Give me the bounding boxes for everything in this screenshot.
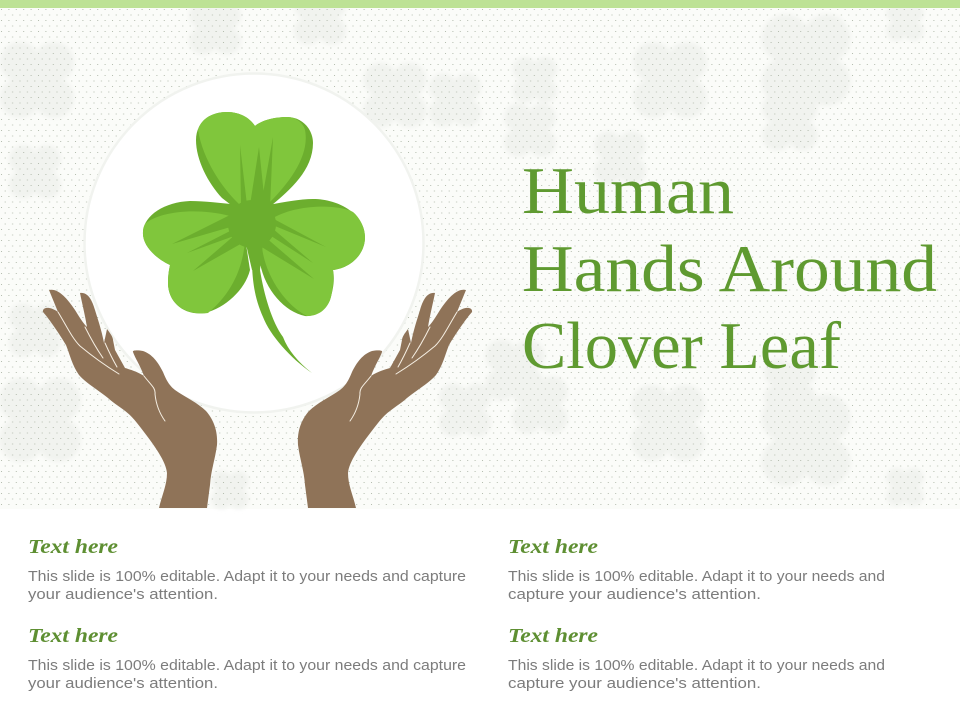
text block: top left: This slide is 100% editable. Adapt it to your needs and capture [28,568,466,585]
top band [0,0,960,8]
icon: left hand [43,290,217,508]
text block: bottom right: This slide is 100% editable. Adapt it to your needs and [508,657,885,674]
text block: top left: Text here [28,536,118,558]
icon: clover leaf [143,112,365,373]
text block: bottom left: Text here [28,625,118,647]
finger creases [350,312,457,421]
title: Clover Leaf [522,309,842,383]
stem [252,265,312,373]
icon: right hand [298,290,472,508]
text block: top right [508,536,885,603]
text block: top right: This slide is 100% editable. Adapt it to your needs and [508,568,885,585]
left leaf [143,201,250,313]
text block: bottom left [28,625,466,692]
finger creases [58,312,165,421]
text block: top right: capture your audience's attention. [508,586,761,603]
white circle [84,74,424,412]
title [522,154,937,383]
text block: bottom right: Text here [508,625,598,647]
text block: top right: Text here [508,536,598,558]
right leaf [260,199,365,316]
text block: bottom right [508,625,885,692]
text block: bottom right: capture your audience's attention. [508,675,761,692]
patterned backdrop [0,0,960,509]
title: Hands Around [522,232,937,306]
title: Human [522,154,734,228]
text block: top left: your audience's attention. [28,586,218,603]
text block: top left [28,536,466,603]
text block: bottom left: This slide is 100% editable. Adapt it to your needs and capture [28,657,466,674]
leaf centre veins [172,137,326,279]
top leaf [196,112,313,225]
text block: bottom left: your audience's attention. [28,675,218,692]
